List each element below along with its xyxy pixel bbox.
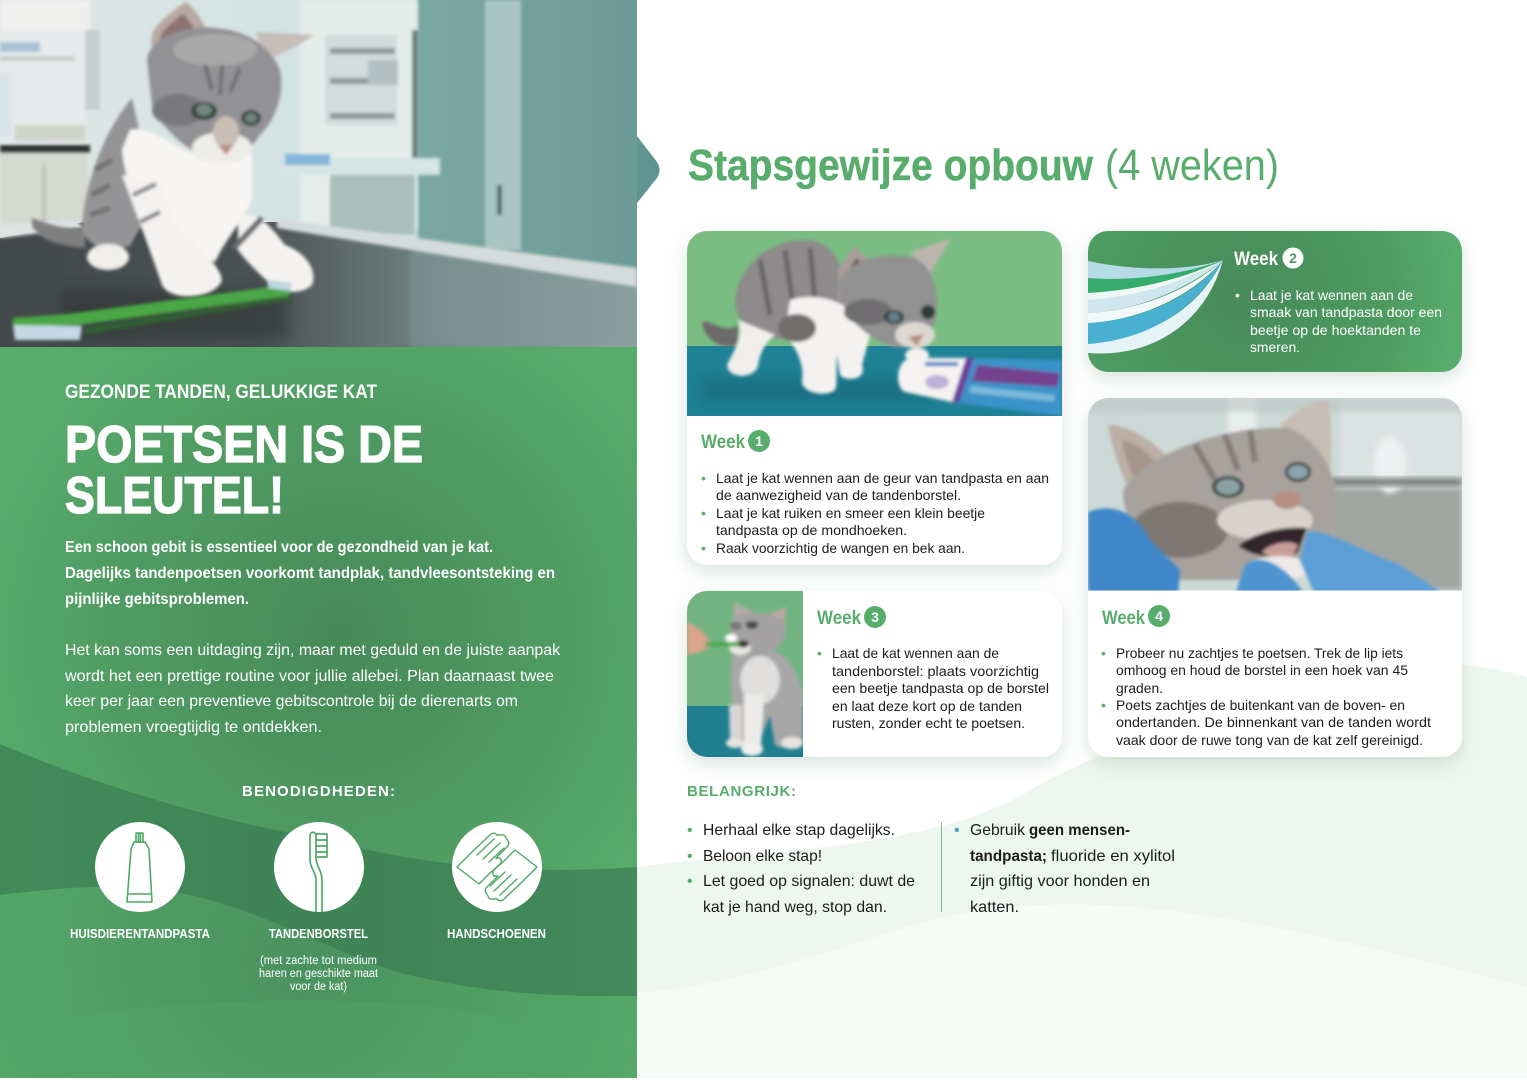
week 1 text: Raak voorzichtig de wangen en bek aan. [716, 540, 965, 556]
week 1 heading: 1 [755, 433, 763, 449]
icon: toothpaste tube [95, 822, 185, 912]
panel: green left column [0, 347, 637, 1078]
toothbrush [13, 280, 292, 340]
week 4 text: omhoog en houd de borstel in een hoek van 45 [1116, 662, 1408, 678]
week 4 text: Poets zachtjes de buitenkant van de boven- en [1116, 697, 1405, 713]
week 2 heading: 2 [1289, 250, 1297, 266]
main heading: POETSEN IS DE [65, 416, 423, 474]
week 1 head [838, 256, 937, 348]
week 4 text: ondertanden. De binnenkant van de tanden wordt [1116, 714, 1431, 730]
week 1 text: • [701, 470, 706, 486]
week 2 text: beetje op de hoektanden te [1250, 322, 1421, 338]
label: handschoenen: HANDSCHOENEN [447, 927, 546, 941]
week 3 text: Laat de kat wennen aan de [832, 645, 999, 661]
week 3 text: tandenborstel: plaats voorzichtig [832, 663, 1039, 679]
card: week 3 [687, 591, 1062, 757]
week 4 text: • [1101, 697, 1106, 713]
week 3 text [817, 645, 1049, 731]
week 1 text: • [701, 505, 706, 521]
week 2 text: • [1235, 287, 1240, 303]
right front leg [238, 215, 313, 292]
week 3 heading: 3 [871, 609, 879, 625]
week 1 text: de aanwezigheid van de tandenborstel. [716, 487, 961, 503]
body text [64, 642, 561, 736]
important list right: fluoride en xylitol [1051, 848, 1175, 865]
week 4 ears [1107, 424, 1166, 484]
page background waves [637, 0, 1527, 1080]
important list left: kat je hand weg, stop dan. [703, 899, 887, 916]
week 1 heading [701, 430, 770, 453]
week 1 tube [950, 358, 1062, 416]
week 1 heading: Week [701, 432, 745, 453]
week 4 text: • [1101, 645, 1106, 661]
body text: keer per jaar een preventieve gebitscontrole bij de dierenarts om [65, 693, 518, 710]
label: tandenborstel: TANDENBORSTEL [269, 927, 368, 941]
body text: Het kan soms een uitdaging zijn, maar met geduld en de juiste aanpak [65, 642, 561, 659]
important list left [687, 822, 915, 916]
week 2 text: smeren. [1250, 339, 1300, 355]
week 4 heading: 4 [1155, 608, 1163, 624]
intro bold text [65, 539, 555, 608]
week 4 heading [1102, 605, 1170, 629]
week 2 text: Laat je kat wennen aan de [1250, 287, 1413, 303]
week 4 text: vaak door de ruwe tong van de kat zelf gereinigd. [1116, 732, 1423, 748]
left front leg [122, 175, 222, 296]
week 2 heading: Week [1234, 249, 1278, 270]
important list right: katten. [970, 899, 1019, 916]
body text: problemen vroegtijdig te ontdekken. [65, 719, 322, 736]
label: tandenborstel: voor de kat) [290, 981, 347, 993]
main heading [65, 416, 423, 525]
label: tandenborstel [259, 927, 379, 993]
kicker: GEZONDE TANDEN, GELUKKIGE KAT [65, 382, 377, 403]
icon: gloves [452, 822, 542, 912]
week 1 text: Laat je kat ruiken en smeer een klein beetje [716, 505, 985, 521]
important list left: Let goed op signalen: duwt de [703, 873, 915, 890]
week 1 text: Laat je kat wennen aan de geur van tandpasta en aan [716, 470, 1049, 486]
important list right: geen mensen- [1029, 822, 1130, 839]
important list left: Herhaal elke stap dagelijks. [703, 822, 895, 839]
card: week 2 [1088, 231, 1462, 372]
week 1 tail [702, 321, 738, 346]
week 3 text: rusten, zonder echt te poetsen. [832, 715, 1025, 731]
important list left: • [687, 873, 693, 890]
title: (4 weken) [1105, 141, 1279, 190]
intro bold text: Een schoon gebit is essentieel voor de gezondheid van je kat. [65, 539, 493, 556]
title: Stapsgewijze opbouw [688, 141, 1094, 190]
card: week 4 [1088, 398, 1462, 757]
head [147, 27, 281, 162]
week 1 text [701, 470, 1049, 556]
important list left: • [687, 822, 693, 839]
important list right [954, 822, 1175, 916]
photo: kitten teeth check with gloved hands [1088, 398, 1462, 595]
week 1 text: tandpasta op de mondhoeken. [716, 522, 907, 538]
week 4 head [1123, 428, 1337, 580]
week 4 text: graden. [1116, 680, 1163, 696]
week 2 text: smaak van tandpasta door een [1250, 304, 1442, 320]
week 4 text: Probeer nu zachtjes te poetsen. Trek de lip iets [1116, 645, 1403, 661]
week 3 text: en laat deze kort op de tanden [832, 698, 1022, 714]
ears [150, 1, 206, 48]
photo: kitten licking toothpaste tube [687, 231, 1062, 416]
icon: toothpaste swirl [1088, 260, 1223, 353]
week 3 heading [817, 606, 886, 629]
icon: toothbrush [274, 822, 364, 912]
important list right: • [954, 822, 960, 839]
photo: kitten with toothbrush on vet table [0, 0, 637, 347]
week 2 heading [1234, 248, 1304, 270]
tail [32, 218, 85, 248]
label: tandenborstel: haren en geschikte maat [259, 968, 379, 980]
important list left: Beloon elke stap! [703, 848, 822, 865]
card: week 1 [687, 231, 1062, 565]
week 1 text: • [701, 540, 706, 556]
photo: kitten with toothbrush [687, 591, 803, 757]
label: tandenborstel: (met zachte tot medium [260, 955, 377, 967]
important heading: BELANGRIJK: [687, 783, 796, 800]
important list right: zijn giftig voor honden en [970, 873, 1150, 890]
week 4 heading: Week [1102, 608, 1145, 629]
week 1 ears [837, 246, 868, 299]
week 1 body [735, 240, 846, 339]
week 3 text: • [817, 645, 822, 661]
important list right: tandpasta; [970, 848, 1047, 865]
week 3 heading: Week [817, 608, 861, 629]
photo notch arrow [637, 136, 660, 203]
important list right: Gebruik [970, 822, 1026, 839]
important list left: • [687, 848, 693, 865]
week 3 text: een beetje tandpasta op de borstel [832, 680, 1049, 696]
week 4 text [1101, 645, 1431, 748]
main heading: SLEUTEL! [65, 467, 284, 525]
intro bold text: Dagelijks tandenpoetsen voorkomt tandplak, tandvleesontsteking en [65, 565, 555, 582]
week 2 text [1235, 287, 1442, 355]
chest [122, 129, 252, 262]
supplies heading: BENODIGDHEDEN: [242, 783, 395, 800]
label: huisdierentandpasta: HUISDIERENTANDPASTA [70, 927, 210, 941]
intro bold text: pijnlijke gebitsproblemen. [65, 591, 249, 608]
body [80, 98, 142, 250]
body text: wordt het een prettige routine voor jullie allebei. Plan daarnaast twee [64, 668, 554, 685]
